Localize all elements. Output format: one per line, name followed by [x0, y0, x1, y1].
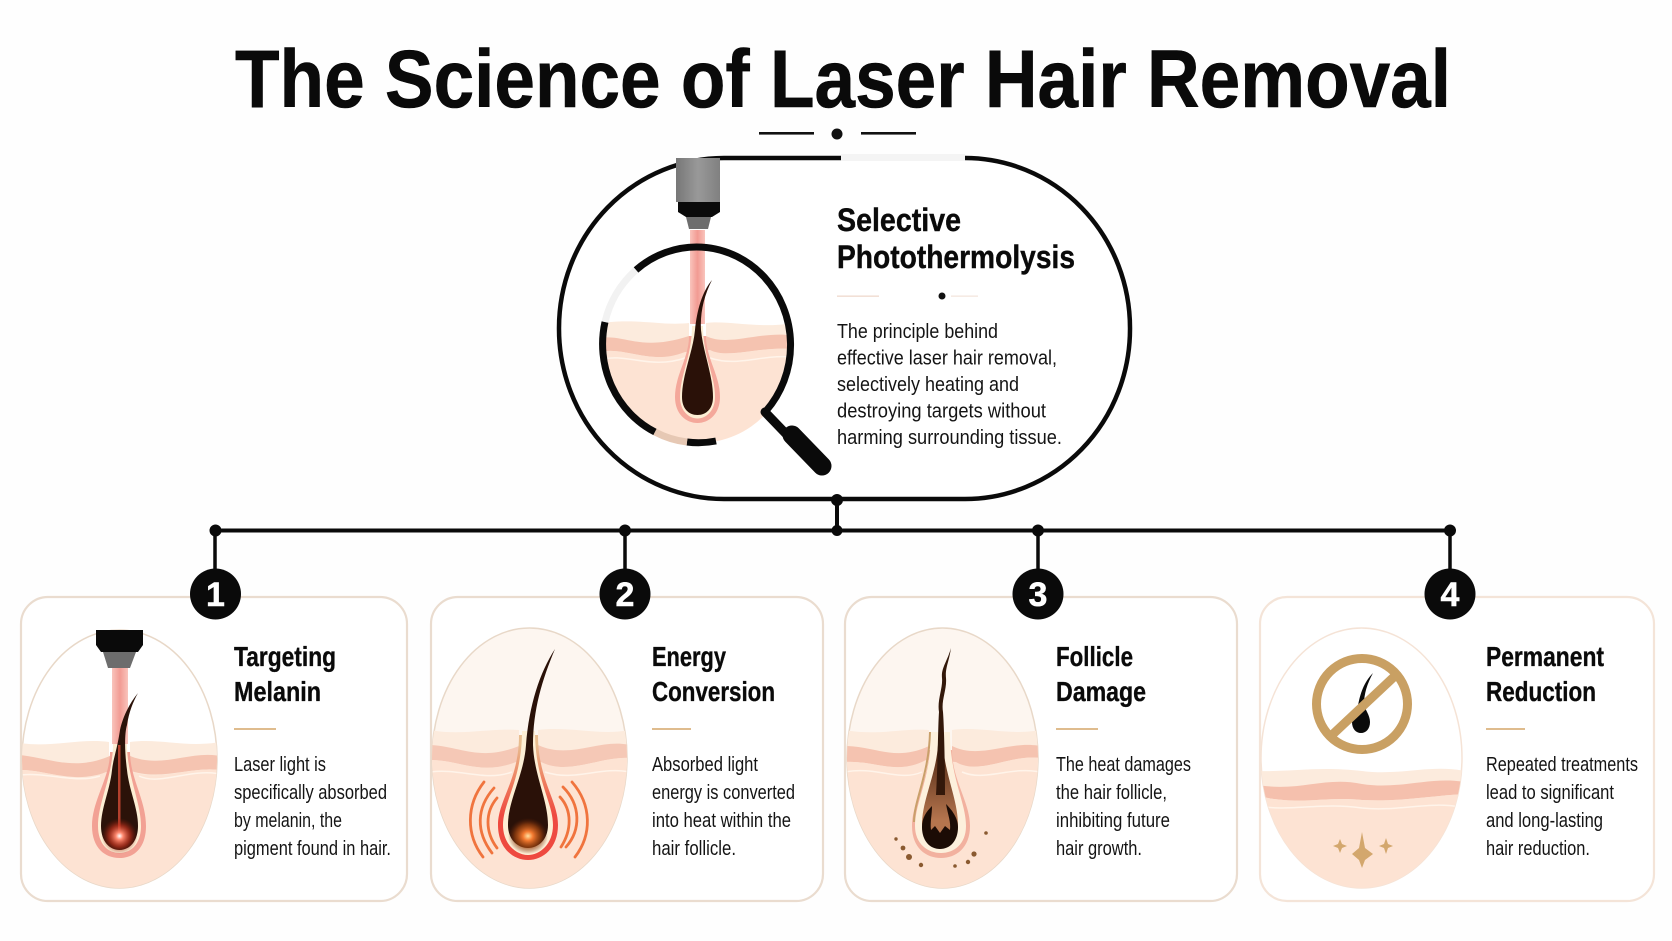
- body text: hair growth.: [1056, 838, 1142, 860]
- pill outline: [559, 158, 1130, 499]
- step badge 3: 3: [1029, 576, 1047, 614]
- step badge 4: 4: [1441, 576, 1460, 614]
- body text: the hair follicle,: [1056, 782, 1167, 804]
- body text: pigment found in hair.: [234, 838, 391, 860]
- body text: specifically absorbed: [234, 782, 387, 804]
- follicle: [675, 336, 720, 423]
- title divider: [759, 128, 916, 140]
- heading: Follicle: [1056, 641, 1133, 672]
- heading: Targeting: [234, 641, 336, 672]
- icon: hair: [1352, 673, 1373, 733]
- hair: [682, 280, 713, 415]
- heading: [1486, 641, 1604, 707]
- step badge 1: 1: [206, 576, 225, 614]
- accent rule: [1486, 728, 1525, 730]
- body text: destroying targets without: [837, 400, 1046, 422]
- body text: inhibiting future: [1056, 810, 1170, 832]
- step badge 4: [1424, 568, 1476, 620]
- icon: sparkles: [1333, 832, 1393, 868]
- accent rule: [234, 728, 276, 730]
- step badge 1: [190, 568, 241, 620]
- heading: Permanent: [1486, 641, 1604, 672]
- body text: Absorbed light: [652, 754, 758, 776]
- heading: [837, 202, 1075, 275]
- heading: Conversion: [652, 676, 775, 707]
- body text: [652, 754, 795, 860]
- title: The Science of Laser Hair Removal: [235, 34, 1451, 125]
- body text: effective laser hair removal,: [837, 346, 1057, 370]
- panel: card 1 targeting melanin: [20, 568, 407, 901]
- body text: selectively heating and: [837, 373, 1019, 396]
- debris specks: [894, 831, 988, 868]
- step badge 2: 2: [616, 576, 634, 614]
- body text: [234, 754, 391, 860]
- heat waves: [470, 782, 587, 857]
- illustration: targeting melanin: [20, 630, 220, 890]
- hair: [101, 693, 138, 850]
- follicle heat ring: [498, 735, 558, 860]
- panel: card 3 follicle damage: [845, 568, 1237, 901]
- body text: Laser light is: [234, 754, 326, 776]
- lens ring: [603, 247, 791, 443]
- panel: card 4 permanent reduction: [1258, 568, 1654, 901]
- heading: Selective: [837, 202, 961, 238]
- illustration: energy conversion: [430, 628, 630, 890]
- body text: and long-lasting: [1486, 810, 1603, 832]
- heading: Energy: [652, 641, 727, 672]
- magnifier handle: [765, 412, 822, 466]
- body text: into heat within the: [652, 810, 791, 832]
- body text: lead to significant: [1486, 782, 1614, 804]
- accent rule: [652, 728, 691, 730]
- icon: laser handpiece: [676, 158, 720, 229]
- heading: Damage: [1056, 676, 1146, 707]
- heading divider: [837, 292, 978, 300]
- body text: energy is converted: [652, 782, 795, 804]
- icon: handpiece tip: [96, 630, 143, 668]
- body text: The principle behind: [837, 320, 998, 343]
- body text: [837, 320, 1062, 449]
- body text: [1056, 754, 1191, 860]
- body text: hair follicle.: [652, 838, 736, 860]
- heading: [234, 641, 336, 707]
- body text: The heat damages: [1056, 754, 1191, 776]
- icon: prohibition sign: [1316, 658, 1408, 750]
- accent rule: [1056, 728, 1098, 730]
- laser beam: [690, 230, 705, 324]
- follicle: [912, 750, 970, 858]
- body text: [1486, 754, 1638, 860]
- follicle: [92, 752, 146, 858]
- heading: Photothermolysis: [837, 239, 1075, 275]
- step badge 2: [600, 568, 650, 620]
- heading: Reduction: [1486, 676, 1596, 707]
- panel: selective photothermolysis: [559, 154, 1130, 499]
- connector tree: [210, 494, 1456, 572]
- body text: Repeated treatments: [1486, 754, 1638, 776]
- illustration: follicle damage: [845, 628, 1040, 890]
- damaged hair: [922, 648, 958, 849]
- body text: by melanin, the: [234, 810, 342, 832]
- illustration: permanent reduction: [1258, 628, 1465, 890]
- body text: harming surrounding tissue.: [837, 426, 1062, 449]
- step badge 3: [1012, 568, 1064, 620]
- icon: magnifier with hair follicle: [600, 230, 822, 466]
- laser beam: [112, 668, 128, 744]
- heading: Melanin: [234, 676, 321, 707]
- panel: card 2 energy conversion: [430, 568, 823, 901]
- body text: hair reduction.: [1486, 838, 1590, 860]
- hair: [508, 649, 555, 848]
- heading: [652, 641, 775, 707]
- heading: [1056, 641, 1146, 707]
